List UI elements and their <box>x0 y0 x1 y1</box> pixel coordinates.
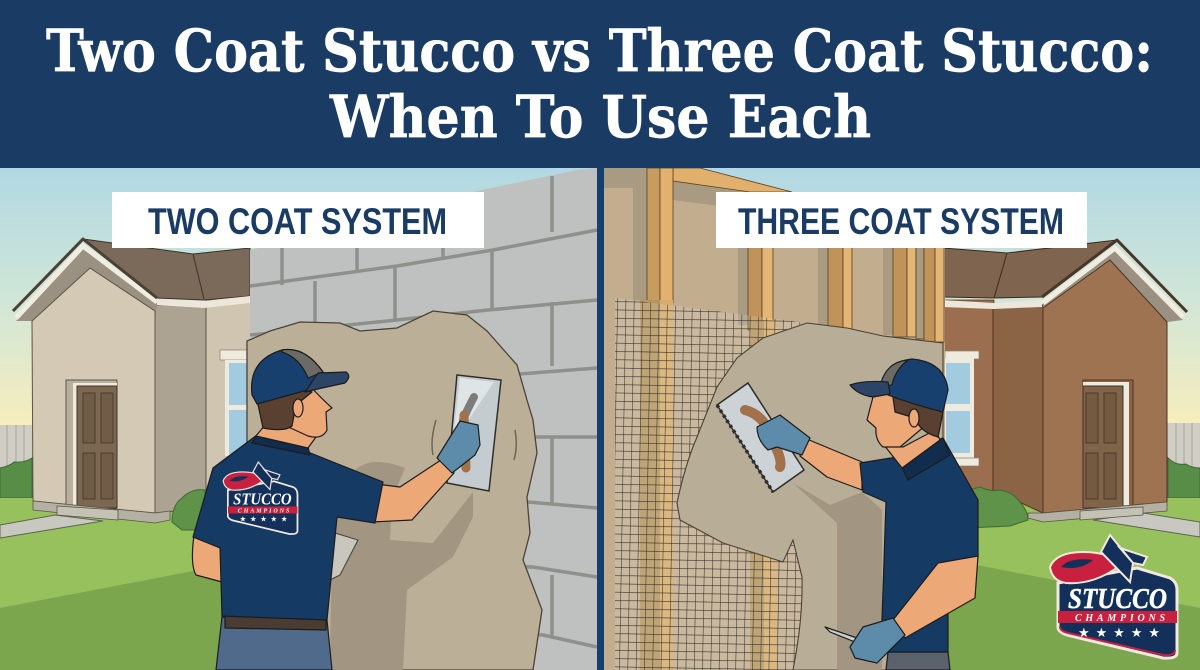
house right <box>943 240 1187 522</box>
panel: two coat scene <box>0 168 600 670</box>
roof <box>83 239 250 300</box>
lower accent <box>1060 627 1175 655</box>
belt <box>225 614 326 630</box>
trowel scratches <box>432 420 516 460</box>
label: three coat system <box>716 192 1087 248</box>
side wall <box>155 305 206 513</box>
notched trowel <box>717 383 804 492</box>
eave band <box>157 296 250 308</box>
gable outline <box>1042 240 1187 312</box>
swoosh inner <box>1061 559 1093 568</box>
fence left <box>0 425 34 469</box>
right arm <box>372 456 454 522</box>
sheathing shading <box>604 168 750 210</box>
ear <box>293 399 303 417</box>
panel: three coat scene <box>600 168 1200 670</box>
worker: two coat <box>192 349 480 670</box>
roof ridge <box>994 253 1007 298</box>
left arm <box>192 535 222 582</box>
base coat patch <box>247 311 542 670</box>
upper glove <box>757 415 810 455</box>
gable outline <box>13 239 157 311</box>
house left <box>13 239 252 523</box>
shirt collar <box>252 435 310 455</box>
hair <box>257 388 312 430</box>
collar <box>897 438 950 480</box>
label: two coat system: TWO COAT SYSTEM <box>148 201 447 242</box>
head <box>284 386 332 437</box>
sky right <box>600 168 1200 508</box>
band <box>1056 611 1180 623</box>
door <box>1083 380 1133 508</box>
roof <box>943 240 1117 298</box>
face <box>867 392 930 447</box>
shirt <box>193 435 383 620</box>
header band <box>0 0 1200 168</box>
badge <box>228 481 297 534</box>
glove <box>437 421 480 473</box>
knife <box>825 627 857 642</box>
mortar joints <box>250 176 597 647</box>
hair <box>893 397 943 437</box>
STUCCO word: STUCCO <box>233 490 292 509</box>
CHAMPIONS word: CHAMPIONS <box>1075 613 1165 624</box>
raised arm <box>800 437 862 490</box>
swoosh <box>223 472 263 490</box>
divider <box>597 168 604 670</box>
flat trowel <box>447 375 501 491</box>
worker: three coat <box>757 359 978 670</box>
swoosh <box>1050 552 1118 583</box>
foundation <box>1028 502 1167 522</box>
window <box>220 350 252 456</box>
fence right <box>1166 423 1200 468</box>
ear <box>909 409 919 427</box>
worker shadow on wall <box>330 462 473 670</box>
worker shadow on wall <box>793 483 882 670</box>
pants <box>216 617 332 670</box>
window <box>945 351 979 466</box>
studs behind mesh <box>640 300 777 670</box>
shirt <box>860 438 978 652</box>
roof ridge <box>193 254 204 299</box>
foundation <box>33 501 170 523</box>
sheathing <box>604 168 945 670</box>
bush right <box>1168 458 1200 498</box>
far wall <box>943 300 994 500</box>
hawk <box>330 533 358 580</box>
step <box>1080 507 1143 520</box>
pants <box>886 652 950 670</box>
door <box>66 380 117 508</box>
forearm <box>893 556 978 638</box>
wood framing <box>633 168 944 342</box>
walkway right <box>1093 513 1200 537</box>
walkway left <box>0 515 103 538</box>
side wall <box>993 305 1043 513</box>
bush left <box>0 458 32 498</box>
swoosh inner <box>230 476 248 481</box>
logo: stucco champions <box>1050 535 1180 658</box>
hat <box>252 349 349 404</box>
STUCCO word: STUCCO <box>1068 583 1167 615</box>
front wall <box>1043 260 1167 513</box>
step <box>57 506 118 520</box>
label: two coat system <box>112 192 484 248</box>
bush by house <box>968 487 1028 528</box>
band <box>227 506 299 513</box>
title line 2: When To Use Each <box>329 83 871 151</box>
stars: ★★★★★ <box>240 515 288 524</box>
gable trim <box>1043 248 1183 317</box>
CHAMPIONS word: CHAMPIONS <box>238 508 289 514</box>
sky left <box>0 168 600 508</box>
metal lath mesh <box>615 298 802 670</box>
front wall <box>32 268 155 513</box>
badge <box>1058 568 1177 658</box>
eave band <box>943 300 1042 309</box>
scratch coat patch <box>677 323 943 670</box>
bush by wall <box>172 490 205 530</box>
logo on shirt <box>223 462 299 534</box>
trowel mark <box>253 462 280 489</box>
neck <box>256 400 316 448</box>
neck <box>884 430 940 468</box>
block wall <box>250 168 597 670</box>
soffit <box>1043 248 1183 322</box>
lawn right <box>930 498 1200 670</box>
hat <box>850 359 948 412</box>
lawn left <box>0 498 260 670</box>
trowel mark <box>1101 535 1147 582</box>
gable trim <box>16 246 157 318</box>
far wall <box>206 300 252 515</box>
lower glove <box>850 618 905 663</box>
soffit <box>16 246 157 321</box>
label: three coat system: THREE COAT SYSTEM <box>738 201 1064 242</box>
stars: ★★★★★ <box>1078 626 1160 641</box>
